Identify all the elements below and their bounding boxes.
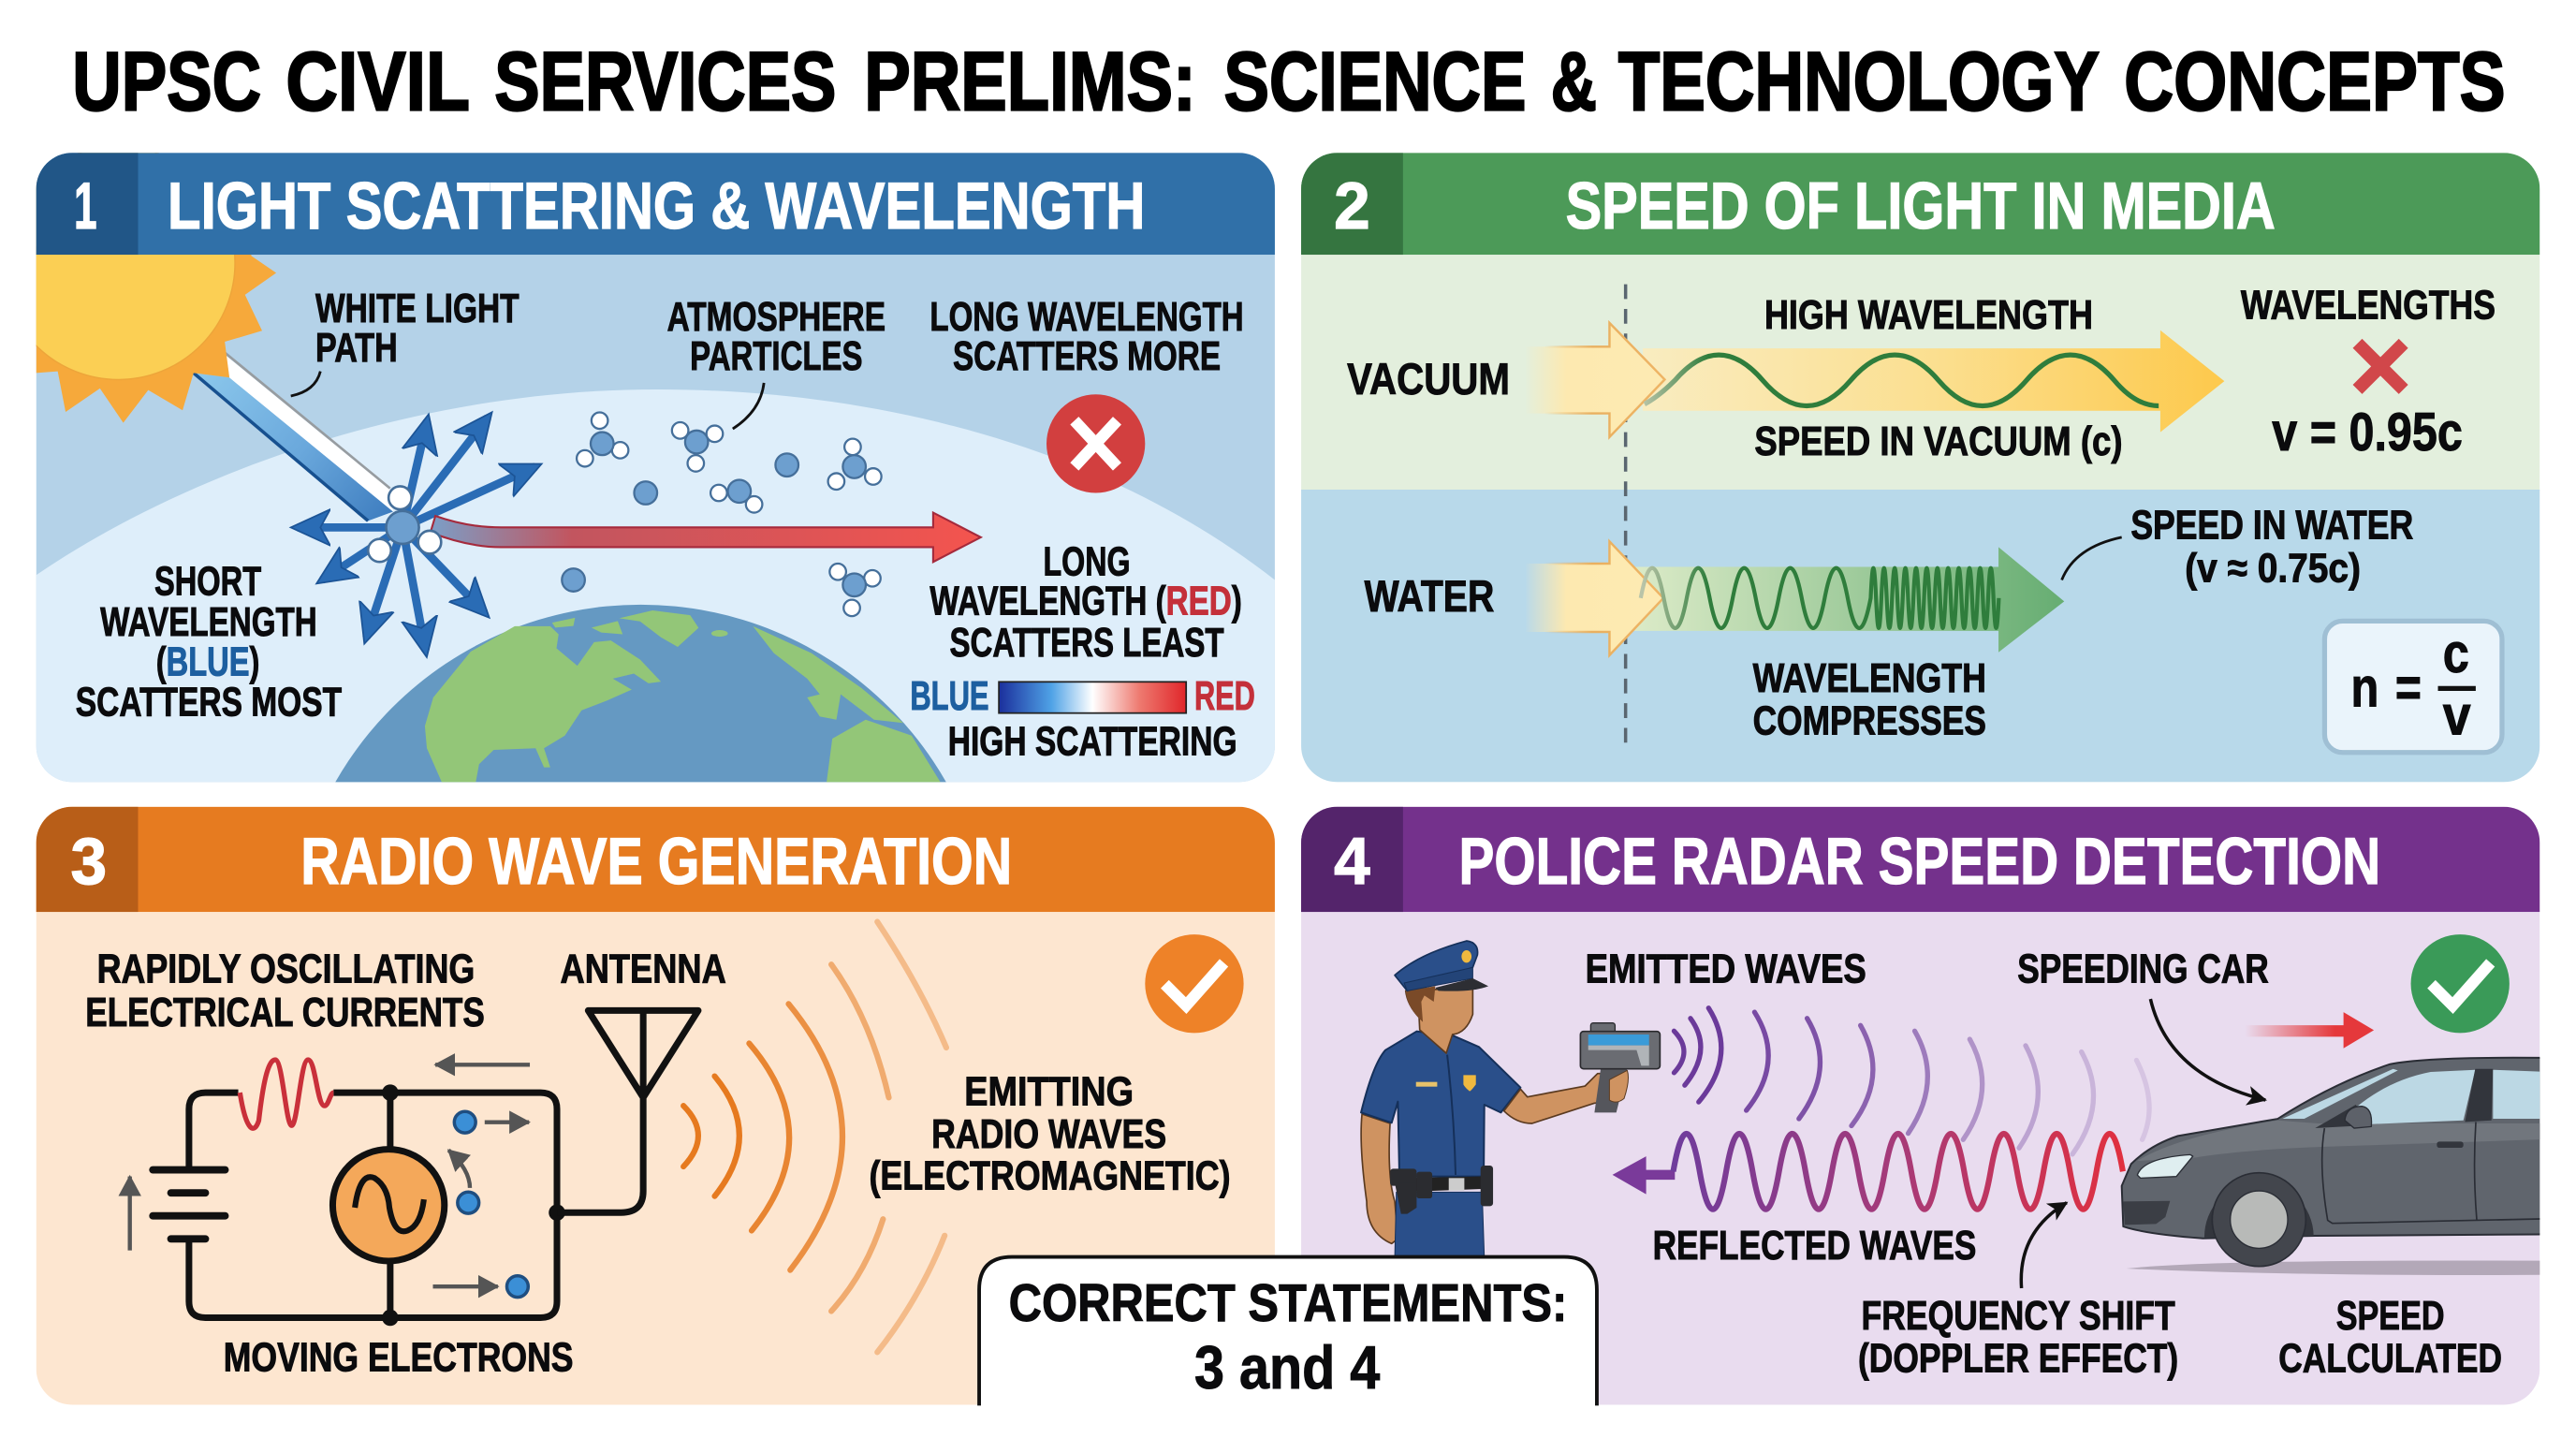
panel 1 labels: (BLUE) [156, 638, 259, 684]
emitted purple wave arcs [1674, 1008, 2149, 1154]
panel 1 labels: PARTICLES [690, 333, 862, 379]
panel 1 labels: ATMOSPHERE [667, 294, 886, 340]
panel 3 labels [85, 946, 1231, 1381]
icon: orange check [1145, 934, 1244, 1033]
panel 4 labels [1586, 946, 2502, 1381]
panel 2 labels: WAVELENGTH [1753, 655, 1986, 701]
icon: battery [153, 1170, 225, 1239]
title: SCIENCE [1224, 35, 1526, 128]
icon: speeding car [2122, 1058, 2553, 1275]
panel 3 labels: ANTENNA [561, 946, 726, 992]
panel 4 labels: (DOPPLER EFFECT) [1858, 1335, 2178, 1381]
panel 1 labels: LONG [1044, 538, 1131, 584]
answer callout: 3 and 4 [1194, 1333, 1380, 1401]
icon: red cross [1046, 394, 1145, 493]
atmosphere particles [562, 413, 882, 616]
title: PRELIMS: [864, 35, 1196, 128]
panel body [1301, 807, 2539, 1405]
panel 2 labels: (v ≈ 0.75c) [2185, 545, 2361, 591]
panel 3 header: RADIO WAVE GENERATION [300, 824, 1012, 898]
panel 1 labels [76, 286, 1244, 764]
panel 2 labels: WAVELENGTHS [2241, 282, 2496, 328]
panel 1 labels: WHITE LIGHT [315, 286, 520, 331]
vacuum wave line [1645, 355, 2159, 405]
scattered blue arrows [298, 418, 535, 651]
formula box: v [2443, 683, 2471, 746]
reflected wave with arrow [1614, 1134, 2123, 1210]
panel 3 labels: (ELECTROMAGNETIC) [869, 1153, 1231, 1199]
panel 3 labels: RAPIDLY OSCILLATING [97, 946, 475, 992]
callout arrows [2021, 999, 2265, 1288]
panel 3 labels: RADIO WAVES [931, 1111, 1166, 1157]
vacuum yellow arrow [1643, 330, 2224, 433]
callout leader lines [291, 372, 764, 429]
panel 2 labels: WATER [1365, 572, 1494, 622]
panel 4 header [1301, 807, 2539, 912]
panel 1 labels: SHORT [154, 558, 261, 604]
callout line to water speed [2062, 537, 2122, 580]
vacuum band [1301, 255, 2539, 492]
title: TECHNOLOGY [1618, 35, 2100, 128]
earth globe [335, 605, 946, 783]
panel 4 labels: EMITTED WAVES [1586, 946, 1866, 992]
panel 4 header: 4 [1334, 824, 1370, 898]
formula box: c [2443, 622, 2469, 684]
icon: red cross [2358, 344, 2404, 389]
water band [1301, 490, 2539, 782]
panel 1 labels: SCATTERS LEAST [949, 620, 1224, 666]
panel 3 header [37, 807, 1275, 912]
panel 3 header: 3 [71, 824, 107, 898]
spectrum legend [912, 681, 1254, 714]
title: & [1551, 35, 1597, 128]
panel 1 labels: PATH [315, 325, 398, 371]
panel 1 labels: LONG WAVELENGTH [929, 294, 1244, 340]
panel 1 labels: SCATTERS MOST [76, 679, 342, 725]
panel 3 labels: ELECTRICAL CURRENTS [85, 990, 485, 1035]
formula box: = [2395, 656, 2422, 719]
scattering centre particles [368, 486, 441, 562]
icon: sun [36, 153, 276, 423]
panel 2 labels: SPEED IN VACUUM (c) [1754, 418, 2123, 464]
title: CIVIL [285, 35, 470, 128]
panel 1 header [37, 153, 1275, 255]
panel 4 header: POLICE RADAR SPEED DETECTION [1459, 824, 2380, 898]
dashed boundary line [1625, 285, 1627, 742]
panel 2 labels [1347, 282, 2496, 743]
car motion red arrow [2245, 1012, 2374, 1049]
vacuum pale incident arrow [1526, 323, 1664, 437]
panel 1 labels: WAVELENGTH [100, 599, 317, 645]
panel 2 labels: VACUUM [1347, 355, 1510, 404]
water pale incident arrow [1526, 541, 1663, 655]
panel 3: radio wave generation [37, 807, 1275, 1405]
panel 4 labels: REFLECTED WAVES [1653, 1223, 1976, 1269]
spectrum legend: BLUE [910, 673, 989, 719]
circuit wires [189, 1093, 557, 1318]
panel 1: light scattering [36, 153, 1275, 783]
panel 4: police radar [1301, 807, 2553, 1405]
answer callout: CORRECT STATEMENTS: [1009, 1273, 1567, 1332]
formula box [2324, 621, 2502, 753]
long-wavelength red arrow [431, 513, 981, 562]
icon: antenna [557, 1010, 698, 1212]
panel 2 header [1301, 153, 2539, 255]
white light beam [194, 353, 393, 521]
answer callout [979, 1257, 1597, 1405]
icon: AC source [332, 1150, 445, 1261]
police officer with radar gun [1361, 941, 1660, 1257]
sky background [37, 153, 1275, 782]
atmosphere dome [37, 389, 1275, 782]
water green arrow [1633, 547, 2064, 653]
panel 4 labels: SPEED [2336, 1293, 2445, 1339]
title [72, 35, 2505, 128]
formula box: n [2351, 656, 2378, 719]
water compressed wave [1641, 568, 1998, 628]
icon: green check [2411, 934, 2510, 1033]
panel 1 labels: SCATTERS MORE [953, 333, 1221, 379]
panel 2 labels: COMPRESSES [1753, 697, 1986, 743]
panel 2 labels: HIGH WAVELENGTH [1764, 292, 2093, 338]
title: SERVICES [494, 35, 836, 128]
emitted radio wave arcs [683, 922, 946, 1352]
title: UPSC [72, 35, 261, 128]
title: CONCEPTS [2124, 35, 2505, 128]
panel 2 labels: v = 0.95c [2272, 403, 2463, 462]
panel 4 labels: SPEEDING CAR [2017, 946, 2269, 992]
panel 2 header: SPEED OF LIGHT IN MEDIA [1566, 169, 2276, 242]
junction nodes [382, 1084, 565, 1326]
panel 3 labels: EMITTING [964, 1068, 1134, 1114]
panel 2 header: 2 [1334, 169, 1370, 242]
panel 1 labels: HIGH SCATTERING [948, 718, 1237, 764]
panel 1 labels: WAVELENGTH (RED) [929, 578, 1242, 624]
panel body [37, 807, 1275, 1405]
icon: resistor [240, 1060, 333, 1128]
panel 4 labels: CALCULATED [2278, 1335, 2502, 1381]
panel 3 labels: MOVING ELECTRONS [224, 1335, 574, 1381]
panel 2: speed of light in media [1301, 153, 2539, 782]
electrons and current arrows [130, 1064, 530, 1298]
panel 2 labels: SPEED IN WATER [2130, 503, 2413, 549]
panel 1 header: LIGHT SCATTERING & WAVELENGTH [168, 169, 1145, 242]
panel 1 header: 1 [74, 169, 97, 242]
panel 4 labels: FREQUENCY SHIFT [1862, 1293, 2175, 1339]
spectrum legend: RED [1194, 673, 1255, 719]
